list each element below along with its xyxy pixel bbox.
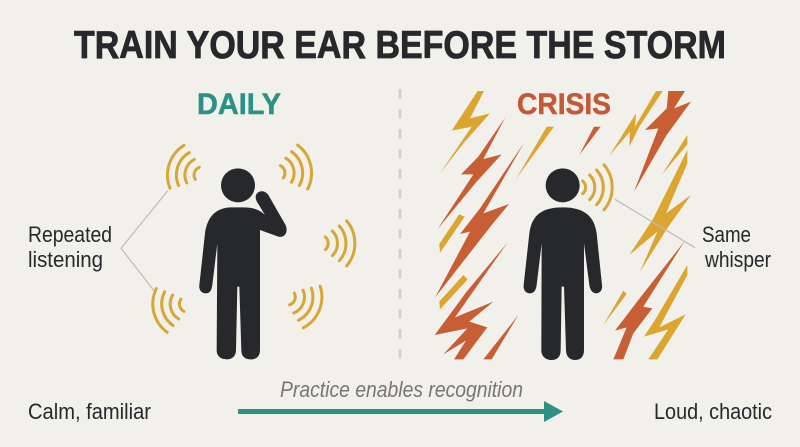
label: same whisper: whisper: [704, 247, 771, 272]
label: repeated listening: Repeated: [28, 222, 112, 247]
panel: daily: [28, 88, 355, 424]
label: loud, chaotic: Loud, chaotic: [654, 399, 772, 424]
lightning bolts: [435, 91, 691, 359]
heading: crisis: CRISIS: [517, 88, 611, 121]
panel: crisis: [435, 88, 772, 424]
person standing: [524, 168, 602, 360]
whisper sound wave: [583, 165, 612, 210]
label: calm, familiar: Calm, familiar: [28, 399, 151, 424]
heading: daily: DAILY: [197, 88, 281, 121]
leader lines: repeated listening: [121, 191, 168, 291]
title: TRAIN YOUR EAR BEFORE THE STORM: [74, 24, 726, 67]
sound waves around the person: [148, 143, 355, 334]
leader line: same whisper: [615, 199, 695, 248]
arrow: practice to recognition: [238, 401, 563, 422]
arrow caption: Practice enables recognition: [280, 377, 523, 402]
label: same whisper: Same: [702, 222, 751, 247]
person listening with hand to ear: [199, 168, 287, 359]
label: repeated listening: listening: [28, 247, 103, 272]
